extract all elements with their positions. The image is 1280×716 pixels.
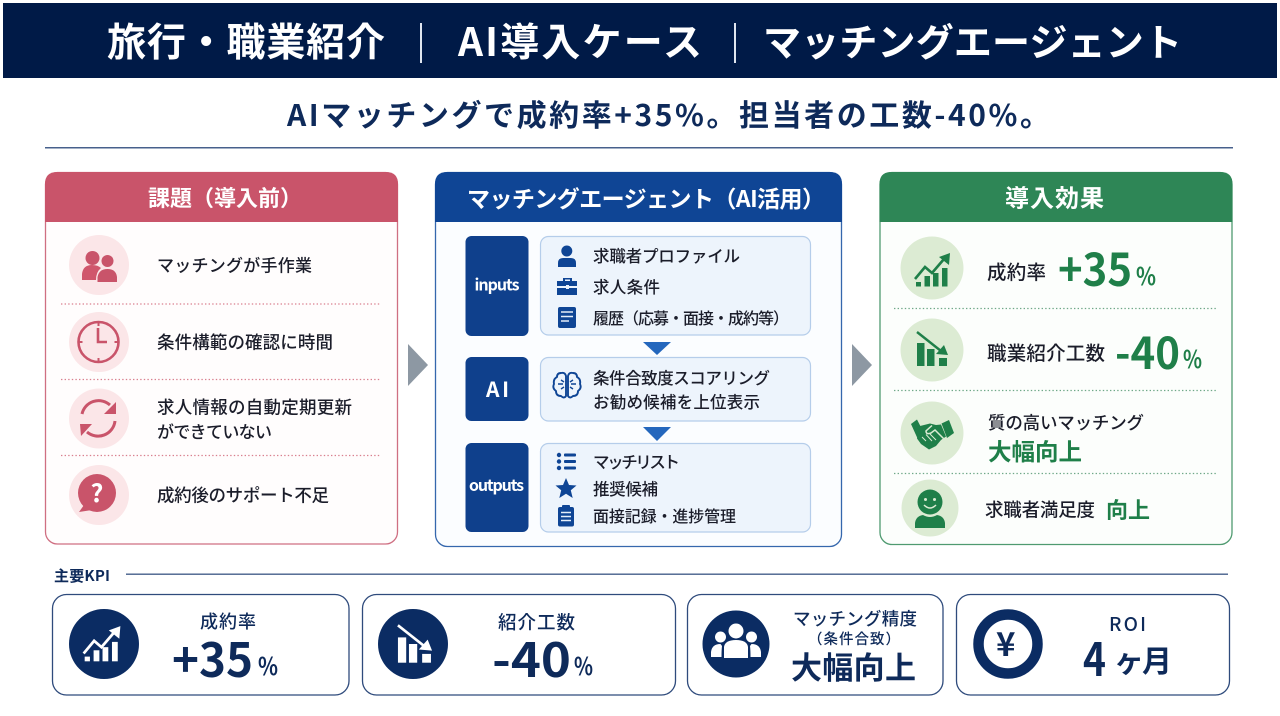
challenge row: lack of support: ? — [90, 474, 103, 510]
challenge row: no automatic update — [69, 388, 352, 448]
inputs label: inputs — [474, 272, 520, 296]
KPI card: matching accuracy: 大幅向上 — [791, 643, 916, 688]
icon: briefcase — [557, 278, 577, 295]
AI box — [540, 358, 810, 421]
outputs box: 面接記録・進捗管理 — [593, 503, 736, 527]
results header: 導入効果 — [1005, 178, 1104, 214]
title banner: AI導入ケース — [457, 12, 702, 68]
inputs label — [466, 236, 528, 336]
panel: matching agent — [435, 172, 842, 546]
agent header: マッチングエージェント（AI活用） — [467, 180, 825, 214]
challenge row: manual matching — [69, 235, 312, 295]
KPI card: placement workload: 紹介工数 — [498, 609, 575, 635]
KPI card: ROI: ¥ — [996, 618, 1015, 666]
panel: challenges before adoption — [45, 172, 398, 544]
challenge row: time for checks — [69, 312, 333, 372]
challenge row: manual matching: マッチングが手作業 — [157, 252, 312, 276]
arrow: inputs to AI — [643, 342, 671, 355]
KPI card: ROI: ヶ月 — [1114, 637, 1172, 681]
outputs label: outputs — [469, 472, 524, 496]
subtitle: AIマッチングで成約率+35%。担当者の工数-40%。 — [286, 91, 1050, 135]
AI label — [466, 357, 528, 421]
AI box: お勧め候補を上位表示 — [593, 389, 760, 413]
challenge row: no automatic update: ができていない — [157, 418, 272, 443]
KPI card: closing rate: 成約率 — [200, 608, 256, 634]
agent header — [435, 172, 842, 222]
result row: job seeker satisfaction: 向上 — [1106, 493, 1150, 525]
result row: placement workload — [900, 318, 1202, 382]
icon: list — [557, 453, 576, 470]
result row: placement workload: % — [1183, 340, 1202, 375]
result row: quality matching — [900, 402, 1144, 467]
result row: placement workload: -40 — [1115, 318, 1180, 382]
arrow: challenges to agent — [408, 344, 428, 386]
AI label: AI — [485, 374, 509, 404]
KPI card: matching accuracy: （条件合致） — [808, 628, 900, 649]
title banner — [3, 3, 1277, 78]
challenges header — [45, 172, 398, 222]
KPI card: placement workload — [362, 594, 676, 695]
outputs box: マッチリスト — [593, 449, 680, 473]
challenge row: lack of support: 成約後のサポート不足 — [157, 482, 329, 508]
result row: placement workload: 職業紹介工数 — [987, 337, 1105, 366]
results header — [880, 172, 1232, 222]
result row: closing rate — [900, 234, 1156, 300]
result row: job seeker satisfaction: 求職者満足度 — [985, 496, 1095, 522]
KPI card: placement workload: -40 — [492, 622, 571, 691]
KPI card: ROI — [956, 594, 1230, 695]
icon: clipboard — [558, 505, 574, 526]
inputs box: 履歴（応募・面接・成約等） — [593, 305, 789, 329]
inputs box: 求人条件 — [593, 274, 660, 298]
icon: person — [558, 246, 576, 267]
result row: closing rate: +35 — [1058, 234, 1132, 299]
icon: document — [558, 307, 576, 328]
inputs box — [540, 236, 810, 335]
icon: star — [556, 478, 576, 498]
challenge row: no automatic update: 求人情報の自動定期更新 — [157, 394, 352, 420]
outputs box — [540, 444, 810, 532]
KPI section heading: 主要KPI — [54, 565, 110, 586]
challenge row: lack of support — [69, 465, 329, 525]
arrow: agent to results — [852, 344, 872, 386]
KPI card: closing rate: % — [258, 647, 278, 682]
outputs label — [466, 443, 528, 532]
result row: closing rate: 成約率 — [987, 256, 1046, 285]
KPI card: placement workload: % — [574, 647, 593, 682]
arrow: AI to outputs — [643, 427, 671, 441]
title banner: マッチングエージェント — [763, 12, 1182, 67]
KPI card: closing rate: +35 — [172, 622, 253, 691]
inputs box: 求職者プロファイル — [593, 243, 740, 267]
outputs box: 推奨候補 — [593, 476, 658, 500]
AI box: 条件合致度スコアリング — [593, 365, 770, 389]
panel: adoption results — [880, 172, 1232, 544]
KPI card: closing rate — [52, 594, 349, 695]
result row: job seeker satisfaction — [902, 480, 1150, 536]
KPI card: ROI: ROI — [1109, 610, 1146, 637]
KPI card: matching accuracy: マッチング精度 — [793, 606, 917, 631]
result row: quality matching: 質の高いマッチング — [988, 410, 1144, 435]
KPI card: matching accuracy — [688, 594, 943, 695]
challenge row: time for checks: 条件構範の確認に時間 — [157, 330, 333, 354]
title banner: 旅行・職業紹介 — [107, 12, 385, 68]
challenges header: 課題（導入前） — [148, 181, 302, 213]
result row: closing rate: % — [1136, 257, 1156, 292]
icon: brain — [553, 373, 581, 398]
KPI card: ROI: 4 — [1083, 624, 1106, 690]
result row: quality matching: 大幅向上 — [988, 433, 1082, 467]
